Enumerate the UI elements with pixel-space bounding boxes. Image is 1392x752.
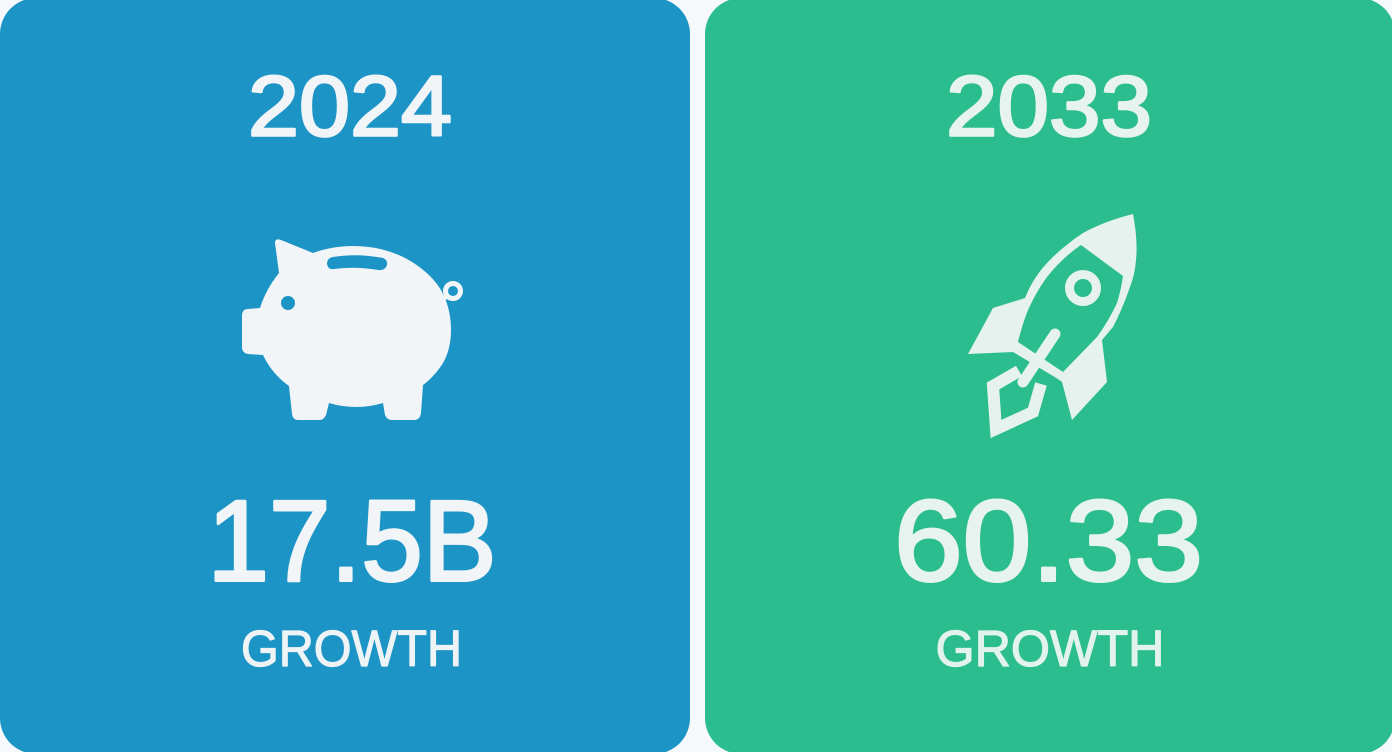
value: 60.33: 60.33 (894, 478, 1203, 606)
heading: 2024: 2024 (248, 60, 452, 154)
panel: 2024 (0, 0, 690, 752)
value: 17.5B: 17.5B (208, 478, 496, 606)
panel background: green (705, 0, 1392, 752)
heading: 2033: 2033 (946, 60, 1152, 154)
label: growth: GROWTH (241, 620, 462, 677)
icon: piggy bank (242, 239, 460, 420)
panel background: blue (0, 0, 690, 752)
panel: 2033 (705, 0, 1392, 752)
label: growth: GROWTH (936, 620, 1164, 677)
icon: rocket (968, 214, 1137, 429)
